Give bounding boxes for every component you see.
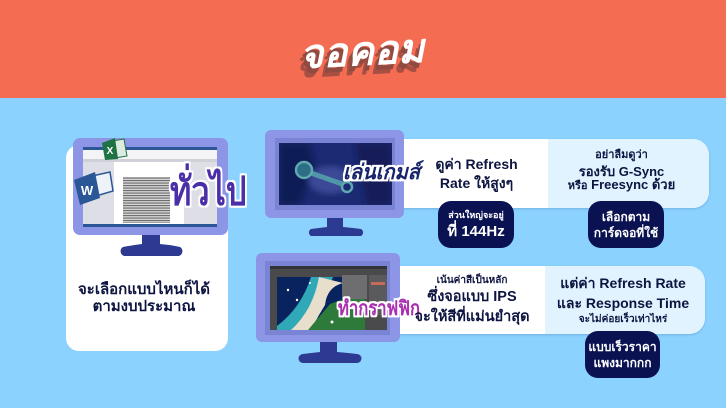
info strip — [400, 266, 705, 334]
icon: excel — [102, 138, 127, 160]
callout: match graphics card: เลือกตาม — [602, 210, 650, 224]
line: reminder: อย่าลืมดูว่า — [595, 149, 648, 161]
icon: word — [74, 172, 113, 205]
text: general description — [78, 280, 210, 315]
callout: 144Hz: ที่ 144Hz — [447, 223, 505, 240]
line: refresh rate: แต่ค่า Refresh Rate — [560, 275, 686, 291]
callout: 144Hz: ส่วนใหญ่จะอยู่ — [448, 210, 504, 220]
icon: excel: X — [107, 146, 114, 157]
text: general description: ตามงบประมาณ — [93, 298, 195, 315]
callout: expensive: แบบเร็วราคา — [588, 340, 657, 354]
callout: expensive — [585, 331, 660, 378]
callout: 144Hz — [438, 201, 514, 248]
text: refresh rate — [435, 156, 518, 192]
line: not so fast: จะไม่ค่อยเร็วเท่าไหร่ — [579, 314, 667, 325]
line: IPS: ซึ่งจอแบบ IPS — [427, 289, 517, 305]
monitor: document screen — [73, 138, 228, 256]
text: refresh rate: Rate ให้สูงๆ — [440, 175, 513, 191]
info strip — [404, 139, 709, 208]
icon: word: W — [81, 183, 94, 198]
line: accurate colour: จะให้สีที่แม่นยำสุด — [414, 309, 530, 325]
text: colour accuracy — [414, 273, 530, 325]
text: refresh and response — [557, 275, 689, 325]
monitor: game screen — [265, 130, 404, 236]
text: g-sync — [568, 148, 675, 192]
text: refresh rate: ดูค่า Refresh — [435, 156, 518, 172]
title: จอคอม — [299, 27, 425, 77]
line: g-sync: รองรับ G-Sync — [579, 164, 664, 179]
text: general description: จะเลือกแบบไหนก็ได้ — [78, 281, 210, 298]
callout: match graphics card — [588, 201, 664, 248]
panel: gaming — [265, 130, 710, 248]
header band — [0, 0, 726, 98]
monitor: photo editing screen — [256, 253, 400, 363]
heading: gaming: เล่นเกมส์ — [343, 161, 420, 184]
card background — [66, 145, 228, 351]
tinted section — [548, 139, 709, 208]
panel: general use — [66, 138, 247, 351]
callout: match graphics card: การ์ดจอที่ใช้ — [594, 226, 658, 240]
callout: expensive: แพงมากกก — [594, 356, 651, 370]
line: colour first: เน้นค่าสีเป็นหลัก — [437, 275, 507, 286]
heading: graphics: ทำกราฟฟิก — [338, 298, 420, 320]
heading: general: ทั่วไป — [170, 170, 246, 214]
line: freesync: หรือ Freesync ด้วย — [568, 177, 675, 192]
panel: graphics — [256, 253, 706, 378]
line: response time: และ Response Time — [557, 295, 689, 311]
tinted section — [545, 266, 705, 334]
